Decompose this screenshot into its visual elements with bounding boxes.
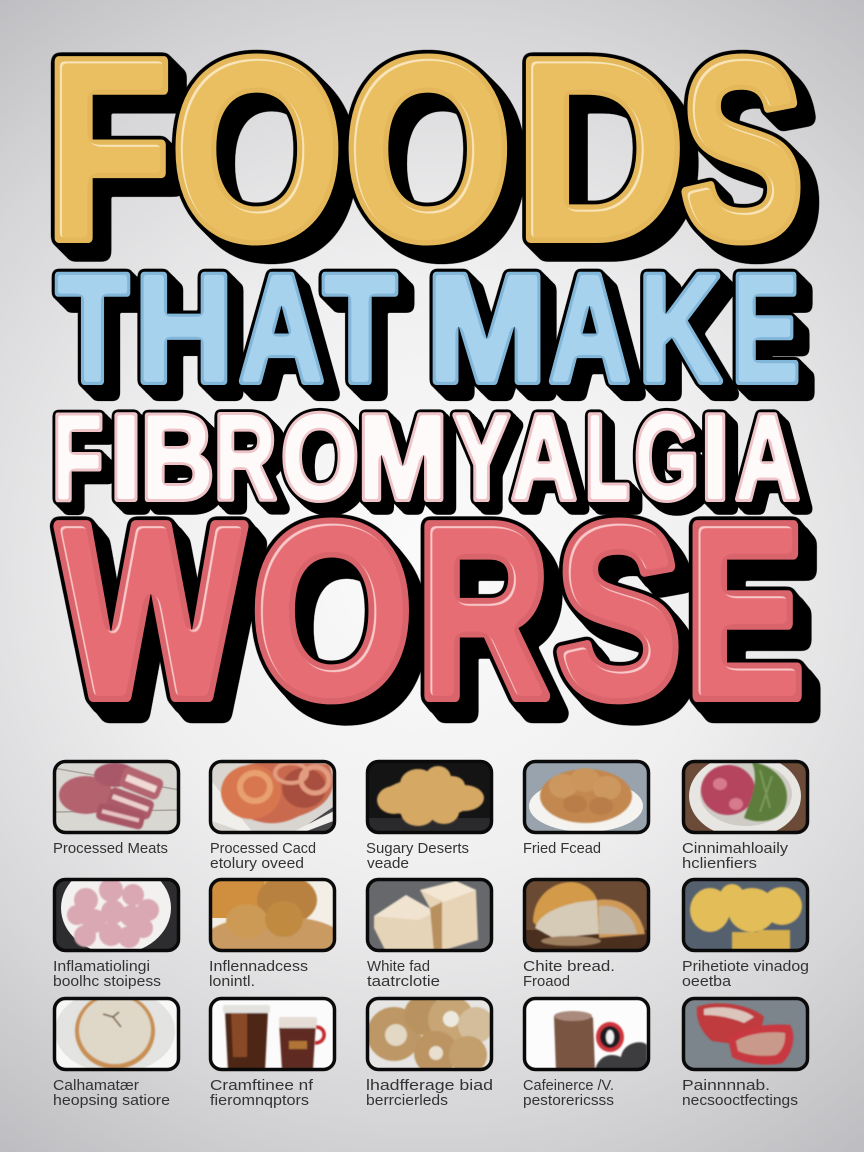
- label: pestorericsss: pestorericsss: [523, 1093, 614, 1109]
- label: taatrclotie: taatrclotie: [367, 974, 440, 990]
- title line: FIBROMYALGIA: F: [52, 389, 104, 525]
- title line: FOODS: F: [45, 6, 172, 293]
- label: fieromnqptors: fieromnqptors: [210, 1093, 309, 1109]
- thumbnail: red pastry trays: [682, 997, 809, 1071]
- label: Calhamatær: Calhamatær: [53, 1078, 139, 1094]
- label: Cafeinerce /V.: Cafeinerce /V.: [523, 1078, 614, 1094]
- thumbnail: golden buns on sugar: [208, 878, 336, 952]
- label: Froaod: Froaod: [523, 974, 570, 990]
- title line: FOODS: S: [680, 6, 804, 293]
- title line: THAT MAKE: M: [427, 243, 546, 414]
- thumbnail: caffeine cylinder and ring: [523, 997, 650, 1071]
- label: boolhc stoipess: boolhc stoipess: [53, 974, 161, 990]
- title line: WORSE: O: [251, 473, 413, 749]
- title line: FOODS: D: [515, 6, 685, 293]
- title line: FIBROMYALGIA: R: [214, 389, 277, 525]
- title line: FOODS: O: [344, 6, 512, 293]
- thumbnail: cola cups: [209, 997, 336, 1071]
- title line: FIBROMYALGIA: O: [281, 389, 359, 525]
- title line: FIBROMYALGIA: I: [700, 389, 730, 525]
- label: Chite bread.: Chite bread.: [523, 959, 615, 975]
- title line: THAT MAKE: T: [56, 243, 128, 414]
- label: etolury oveed: etolury oveed: [210, 856, 304, 872]
- thumbnail: cut bread loaf: [523, 878, 650, 952]
- title line: FIBROMYALGIA: L: [585, 389, 630, 525]
- label: White fad: White fad: [367, 959, 430, 975]
- label: necsooctfectings: necsooctfectings: [682, 1093, 798, 1109]
- title line: THAT MAKE: E: [732, 243, 800, 414]
- label: Cinnimahloaily: Cinnimahloaily: [682, 841, 789, 857]
- title line: WORSE: S: [556, 473, 681, 749]
- thumbnail: bread slice on plate: [52, 996, 180, 1072]
- label: oeetba: oeetba: [682, 974, 732, 990]
- label: Processed Cacd: Processed Cacd: [210, 841, 316, 857]
- thumbnail: swirl pastries: [366, 995, 494, 1075]
- title line: THAT MAKE: A: [549, 243, 630, 414]
- food grid: [53, 754, 809, 1109]
- label: berrcierleds: berrcierleds: [366, 1093, 448, 1109]
- label: heopsing satiore: heopsing satiore: [53, 1093, 170, 1109]
- label: Prihetiote vinadog: Prihetiote vinadog: [682, 959, 809, 975]
- title line: THAT MAKE: K: [639, 243, 721, 414]
- title line: WORSE: E: [685, 473, 804, 749]
- title line: WORSE: R: [416, 473, 550, 749]
- thumbnail: pink balls bowl: [52, 878, 180, 952]
- label: Fried Fcead: Fried Fcead: [523, 841, 601, 857]
- title line: FIBROMYALGIA: A: [735, 389, 800, 525]
- thumbnail: processed meats: [53, 760, 180, 834]
- label: lonintl.: lonintl.: [209, 974, 255, 990]
- label: Processed Meats: Processed Meats: [53, 841, 168, 857]
- label: Inflamatiolingi: Inflamatiolingi: [53, 959, 150, 975]
- title line: WORSE: W: [58, 473, 244, 749]
- title line: THAT MAKE: A: [239, 243, 324, 414]
- label: hclienfiers: hclienfiers: [682, 856, 757, 872]
- title line: THAT MAKE: H: [135, 243, 233, 414]
- title: [45, 6, 804, 749]
- thumbnail: white bread blocks: [366, 878, 493, 952]
- title line: FIBROMYALGIA: A: [511, 389, 577, 525]
- thumbnail: sugary desserts: [366, 760, 493, 834]
- label: lhadfferage biad: lhadfferage biad: [366, 1078, 493, 1094]
- label: Sugary Deserts: Sugary Deserts: [366, 841, 469, 857]
- label: Inflennadcess: Inflennadcess: [209, 959, 308, 975]
- thumbnail: fried food: [523, 760, 650, 834]
- title line: FIBROMYALGIA: M: [357, 389, 448, 525]
- title line: THAT MAKE: T: [323, 243, 396, 414]
- title line: FIBROMYALGIA: B: [140, 389, 214, 525]
- thumbnail: meat and greens bowl: [682, 760, 810, 834]
- title line: FIBROMYALGIA: Y: [453, 389, 510, 525]
- thumbnail: yellow fried pieces: [682, 878, 809, 952]
- title line: FIBROMYALGIA: I: [109, 389, 143, 525]
- label: Painnnnab.: Painnnnab.: [682, 1078, 770, 1094]
- label: Cramftinee nf: Cramftinee nf: [210, 1078, 314, 1094]
- label: veade: veade: [367, 856, 409, 872]
- title line: FOODS: O: [171, 6, 343, 293]
- thumbnail: processed rings: [209, 760, 336, 834]
- title line: FIBROMYALGIA: G: [634, 389, 699, 525]
